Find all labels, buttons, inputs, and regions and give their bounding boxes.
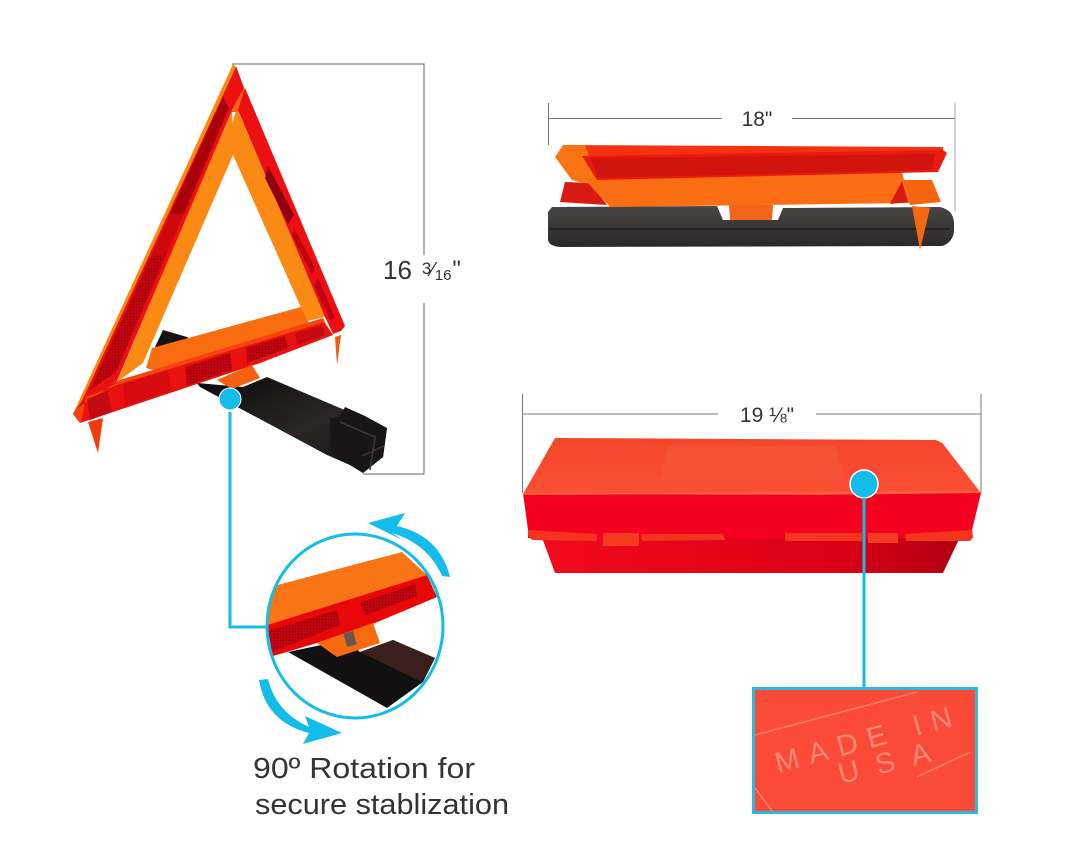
product: opened warning triangle — [73, 64, 387, 473]
rear small red panel — [560, 182, 607, 205]
dimension: width 18 — [548, 103, 955, 212]
dimension: width 18: 18" — [742, 108, 772, 131]
box lid top — [523, 438, 981, 495]
detail photo: made in USA — [754, 688, 976, 812]
embossed label on lid — [660, 446, 845, 482]
black case — [548, 206, 954, 247]
right foot — [335, 335, 341, 365]
bottom reflective bar — [73, 318, 333, 423]
red bar detail — [267, 575, 437, 656]
caption — [253, 753, 509, 821]
arrow: upper rotation — [368, 513, 450, 577]
red reflector — [582, 150, 947, 180]
black case behind triangle — [155, 330, 387, 473]
callout dot on box — [850, 470, 878, 498]
lid crease highlight — [523, 492, 981, 494]
caption: secure stablization — [255, 789, 509, 821]
leader line to detail — [230, 412, 268, 627]
dimension: height 16 3/16: 16 — [383, 255, 412, 285]
detail photo: made in USA: MADE IN — [772, 702, 956, 780]
left reflective arm — [73, 64, 244, 414]
rear strip — [563, 145, 943, 158]
orange panel detail — [267, 552, 427, 625]
right reflective arm — [238, 88, 345, 334]
caption: 90º Rotation for — [253, 753, 475, 785]
dimension: height 16 3/16 — [232, 64, 461, 474]
rear red triangle on panel — [890, 181, 908, 204]
black case detail — [288, 640, 435, 708]
dimension: height 16 3/16: " — [452, 256, 461, 283]
callout dot — [219, 388, 241, 410]
dimension: height 16 3/16: 3 — [422, 259, 431, 278]
dimension: height 16 3/16: ⁄ — [426, 259, 437, 281]
arrow: lower rotation — [259, 679, 342, 744]
dimension: width 19 1/8: 19 ⅛" — [740, 404, 794, 427]
hinge — [729, 205, 773, 220]
detail photo: made in USA: USA — [835, 737, 935, 791]
right foot — [912, 206, 930, 250]
hinge detail — [317, 623, 380, 657]
lip tabs — [528, 530, 973, 546]
hinge — [217, 365, 260, 389]
box lid front — [523, 493, 981, 538]
infographic — [73, 64, 982, 814]
dimension: height 16 3/16: 16 — [435, 267, 451, 284]
dimension: width 19 1/8 — [522, 394, 981, 493]
orange panel — [583, 172, 910, 207]
product: folded triangle on case — [548, 145, 954, 250]
left foot — [88, 418, 103, 453]
orange back panels — [117, 108, 325, 382]
detail circle: hinge — [267, 534, 443, 718]
leader line to photo — [862, 498, 866, 688]
rear orange panel — [902, 180, 941, 205]
product: red storage box — [523, 438, 981, 573]
box lower — [541, 535, 961, 573]
corner — [555, 145, 597, 183]
apex joint — [231, 88, 246, 112]
